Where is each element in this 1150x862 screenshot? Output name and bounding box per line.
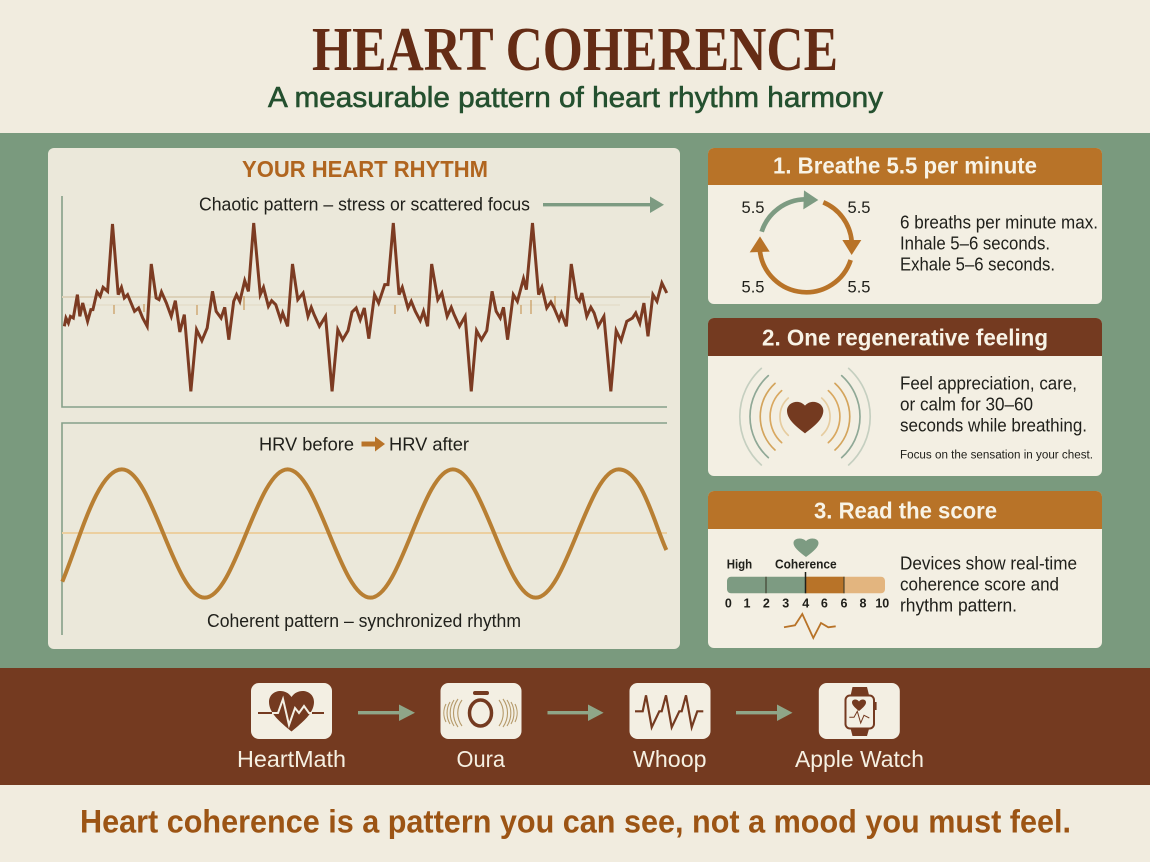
cycle values: [742, 198, 870, 296]
chart: coherent rhythm: [62, 423, 667, 635]
score scale numbers: 0: [725, 596, 732, 610]
step 1 text: Inhale 5–6 seconds.: [900, 234, 1050, 254]
device: Whoop: [630, 683, 710, 772]
score scale numbers: 3: [782, 596, 789, 610]
device: Whoop: Whoop: [633, 746, 706, 772]
step 3 text: rhythm pattern.: [900, 595, 1017, 615]
footer band: [0, 785, 1150, 862]
device: HeartMath: [237, 683, 346, 772]
score scale numbers: [725, 596, 889, 610]
score scale numbers: 8: [860, 596, 867, 610]
HRV before label: HRV before: [259, 434, 354, 454]
score labels: High: [727, 558, 752, 572]
tagline: Heart coherence is a pattern you can see, not a mood you must feel.: [80, 804, 1071, 840]
panel: devices band: [0, 668, 1150, 785]
panel: your heart rhythm: [48, 148, 680, 649]
icon: mini rhythm: [784, 614, 836, 638]
arrow: Oura to Whoop: [548, 704, 604, 721]
step 1 heading: 1. Breathe 5.5 per minute: [773, 152, 1037, 178]
cycle values: 5.5: [848, 198, 870, 217]
step 2 text: Feel appreciation, care,: [900, 374, 1077, 394]
score scale numbers: 10: [875, 596, 889, 610]
chaotic pattern label: Chaotic pattern – stress or scattered focus: [199, 194, 530, 214]
step 2 text: seconds while breathing.: [900, 416, 1087, 436]
green main background: [0, 133, 1150, 668]
step 3 text: Devices show real-time: [900, 554, 1077, 574]
panel: step 2 feeling: [708, 318, 1102, 476]
panel: step 1 breathe: [708, 148, 1102, 304]
title: HEART COHERENCE: [312, 16, 838, 84]
arrow: chaotic direction: [543, 196, 664, 213]
step 1 text: [900, 212, 1098, 274]
panel heading: YOUR HEART RHYTHM: [242, 156, 488, 182]
cycle values: 5.5: [848, 278, 870, 296]
coherent pattern label: Coherent pattern – synchronized rhythm: [207, 611, 521, 631]
step 2 text: or calm for 30–60: [900, 394, 1033, 414]
step 2 text: [900, 374, 1087, 436]
icon: breathing cycle: [750, 190, 861, 292]
step 3 header: [708, 491, 1102, 529]
icon: radiating heart: [740, 368, 870, 465]
step 2 note: Focus on the sensation in your chest.: [900, 450, 1093, 462]
score scale numbers: 6: [841, 596, 848, 610]
step 1 text: 6 breaths per minute max.: [900, 212, 1098, 232]
device: Apple Watch: Apple Watch: [795, 746, 924, 772]
step 3 heading: 3. Read the score: [814, 498, 997, 524]
icon: green heart marker: [794, 539, 818, 557]
score scale numbers: 6: [821, 596, 828, 610]
cycle values: 5.5: [742, 278, 764, 296]
cycle values: 5.5: [742, 198, 764, 217]
subtitle: A measurable pattern of heart rhythm harmony: [268, 82, 884, 114]
score bar: [727, 572, 885, 593]
header band: [0, 0, 1150, 133]
score labels: [727, 558, 837, 572]
step 2 header: [708, 318, 1102, 356]
device: Oura: [440, 683, 522, 772]
arrow: HeartMath to Oura: [358, 704, 415, 721]
step 1 header: [708, 148, 1102, 185]
step 1 text: Exhale 5–6 seconds.: [900, 254, 1055, 274]
score labels: Coherence: [775, 558, 837, 572]
HRV after label: HRV after: [389, 434, 469, 454]
device: Apple Watch: [795, 683, 924, 772]
score scale numbers: 4: [802, 596, 809, 610]
device: Oura: Oura: [456, 746, 505, 772]
step 3 text: coherence score and: [900, 574, 1059, 594]
step 3 text: [900, 554, 1077, 615]
arrow: Whoop to Apple Watch: [736, 704, 792, 721]
score scale numbers: 2: [763, 596, 770, 610]
device: HeartMath: HeartMath: [237, 746, 346, 772]
step 2 heading: 2. One regenerative feeling: [762, 324, 1048, 350]
score scale numbers: 1: [744, 596, 751, 610]
panel: step 3 score: [708, 491, 1102, 648]
chart: chaotic rhythm: [62, 196, 667, 407]
arrow: HRV: [362, 436, 385, 452]
